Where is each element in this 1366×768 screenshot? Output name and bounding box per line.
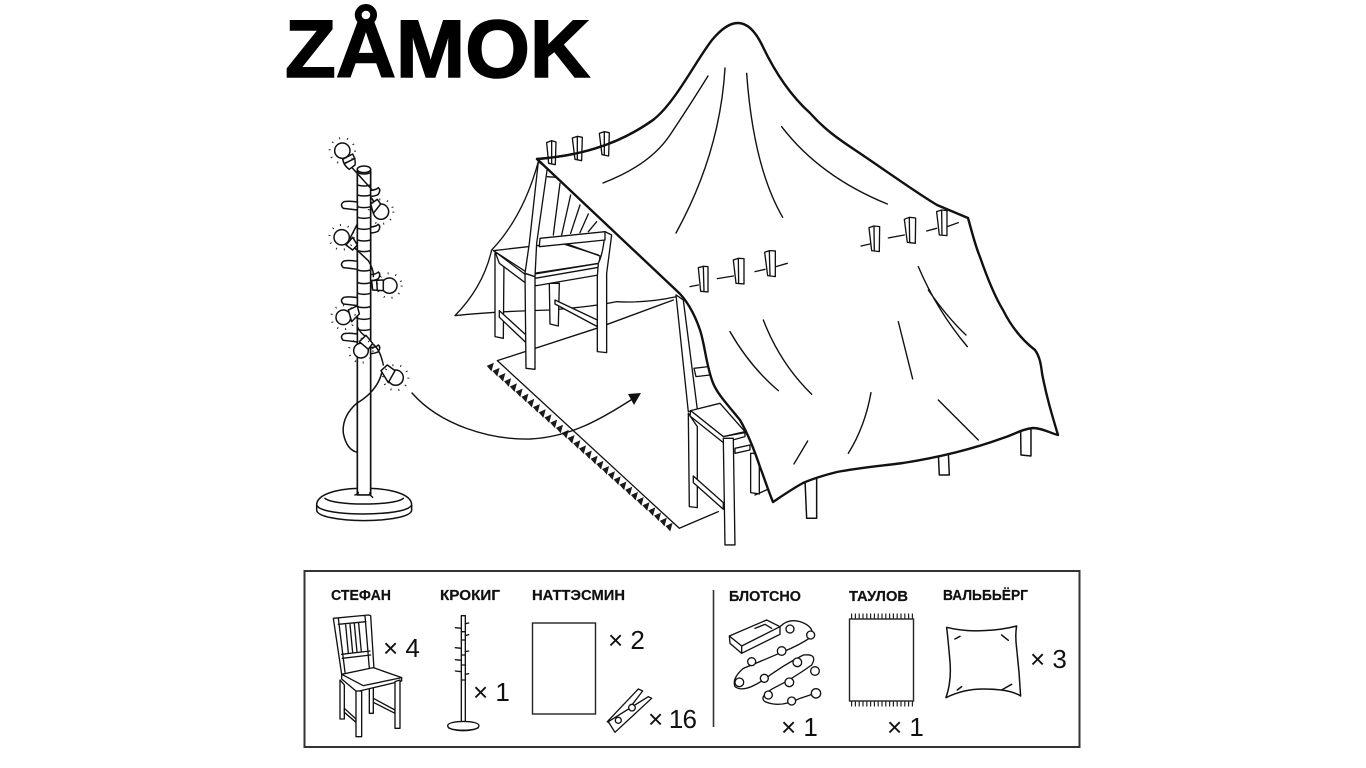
bulb lights bbox=[329, 138, 408, 390]
rack pole bbox=[355, 166, 373, 497]
chair under sheet left bbox=[493, 162, 612, 369]
blanket top edge bbox=[537, 120, 653, 159]
part: ТАУЛОВ bbox=[849, 589, 914, 704]
part: НАТТЭСМИН: НАТТЭСМИН bbox=[532, 588, 625, 604]
rack base bbox=[317, 488, 412, 521]
part: БЛОТСНО: БЛОТСНО bbox=[729, 589, 801, 605]
rack hooks bbox=[341, 188, 380, 354]
title: ZÅMOK bbox=[285, 4, 590, 95]
sheet legs bbox=[805, 428, 1031, 518]
quantity labels: × 1 bbox=[473, 677, 510, 707]
battery box bbox=[729, 620, 780, 653]
quantity labels: × 2 bbox=[608, 625, 645, 655]
parts divider bbox=[712, 590, 714, 727]
blanket folds bbox=[603, 68, 978, 464]
part: СТЕФАН: СТЕФАН bbox=[331, 588, 391, 604]
part: ВАЛЬБЬЁРГ bbox=[943, 587, 1028, 698]
quantity labels: × 16 bbox=[648, 704, 697, 734]
part: НАТТЭСМИН bbox=[532, 588, 652, 732]
quantity labels bbox=[383, 625, 1067, 742]
clothes pegs on top edge bbox=[547, 132, 609, 165]
quantity labels: × 3 bbox=[1030, 644, 1067, 674]
light wire bbox=[343, 168, 383, 452]
part: БЛОТСНО bbox=[729, 589, 821, 705]
part: СТЕФАН bbox=[331, 588, 402, 737]
part: ВАЛЬБЬЁРГ: ВАЛЬБЬЁРГ bbox=[943, 587, 1028, 604]
chair under sheet right bbox=[676, 295, 759, 545]
coat rack with lights bbox=[317, 138, 412, 521]
rug outline bbox=[497, 300, 793, 528]
part: ТАУЛОВ: ТАУЛОВ bbox=[849, 589, 908, 605]
blanket bbox=[537, 23, 1058, 502]
quantity labels: × 1 bbox=[781, 712, 818, 742]
clothes peg bbox=[607, 689, 652, 732]
part: КРОКИГ bbox=[440, 588, 500, 731]
back sheet bbox=[455, 162, 677, 316]
clothes pegs on blanket bbox=[690, 210, 958, 292]
quantity labels: × 4 bbox=[383, 633, 420, 663]
rug bbox=[487, 300, 793, 531]
part: КРОКИГ: КРОКИГ bbox=[440, 588, 500, 604]
arrow bbox=[412, 393, 641, 439]
quantity labels: × 1 bbox=[887, 712, 924, 742]
rug tassels bbox=[487, 363, 672, 531]
parts box bbox=[304, 571, 1080, 747]
